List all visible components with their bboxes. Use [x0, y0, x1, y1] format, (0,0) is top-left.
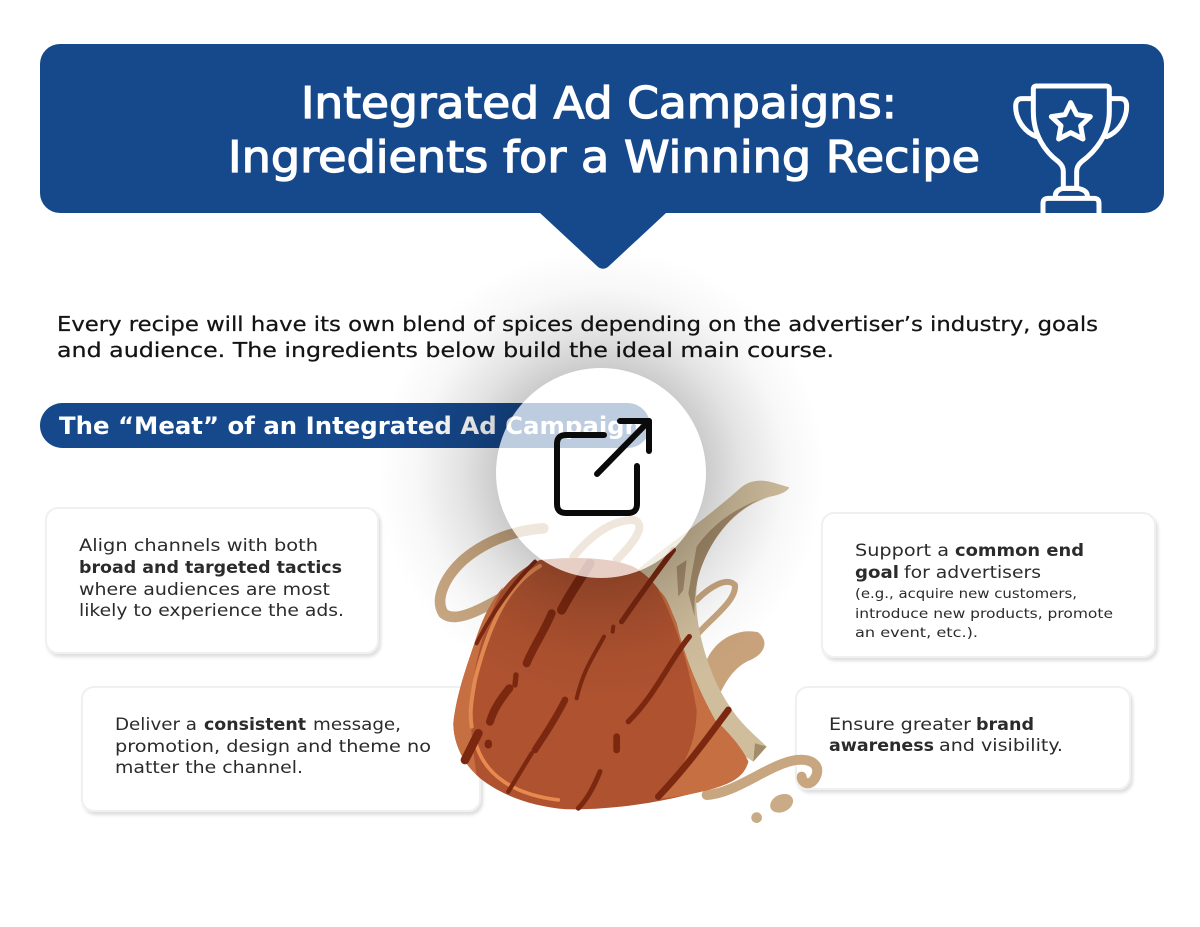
card: common end goal: for advertisers — [904, 563, 1041, 582]
grill marks — [465, 550, 728, 808]
section heading: the meat — [40, 403, 650, 448]
card: common end goal: introduce new products, promote — [855, 606, 1113, 622]
card: consistent message: promotion, design and theme no — [115, 737, 431, 756]
card: common end goal: Support a — [855, 541, 949, 560]
card: brand awareness: and visibility. — [939, 736, 1063, 755]
card: broad and targeted tactics: broad and targeted tactics — [79, 558, 342, 577]
card: common end goal: goal — [855, 563, 899, 582]
card: broad and targeted tactics: where audiences are most — [79, 580, 331, 599]
card: brand awareness: Ensure greater — [829, 715, 971, 734]
card: common end goal: an event, etc.). — [855, 625, 978, 641]
card: brand awareness — [796, 687, 1130, 789]
card: broad and targeted tactics: likely to experience the ads. — [79, 601, 344, 620]
card: broad and targeted tactics: Align channels with both — [79, 536, 318, 555]
sauce swirls — [440, 520, 817, 823]
card: consistent message: consistent — [204, 715, 306, 734]
card: common end goal: (e.g., acquire new customers, — [855, 586, 1077, 602]
meat rim — [658, 590, 748, 799]
section heading: the meat: The “Meat” of an Integrated Ad Campaign — [59, 412, 642, 440]
intro text: and audience. The ingredients below build the ideal main course. — [57, 338, 834, 362]
card: consistent message: message, — [313, 715, 401, 734]
header banner — [40, 44, 1164, 269]
icon: external link — [557, 421, 649, 513]
illustration: grilled meat chop with sauce — [440, 481, 817, 823]
card: common end goal: common end — [955, 541, 1084, 560]
link overlay shadow — [376, 248, 826, 698]
link overlay circle — [496, 368, 706, 578]
bone — [633, 481, 789, 762]
meat body — [453, 558, 748, 809]
card: brand awareness: brand — [976, 715, 1034, 734]
card: brand awareness: awareness — [829, 736, 934, 755]
icon: trophy — [1016, 86, 1127, 213]
intro text: Every recipe will have its own blend of spices depending on the advertiser’s industry, goals — [57, 312, 1098, 336]
card: broad and targeted tactics — [46, 508, 378, 653]
card: consistent message: Deliver a — [115, 715, 197, 734]
card: common end goal — [822, 513, 1155, 657]
card: consistent message: matter the channel. — [115, 758, 303, 777]
title: Integrated Ad Campaigns: — [301, 78, 897, 129]
card: consistent message — [82, 687, 480, 811]
title — [228, 78, 980, 183]
intro text — [57, 312, 1098, 362]
title: Ingredients for a Winning Recipe — [228, 132, 980, 183]
